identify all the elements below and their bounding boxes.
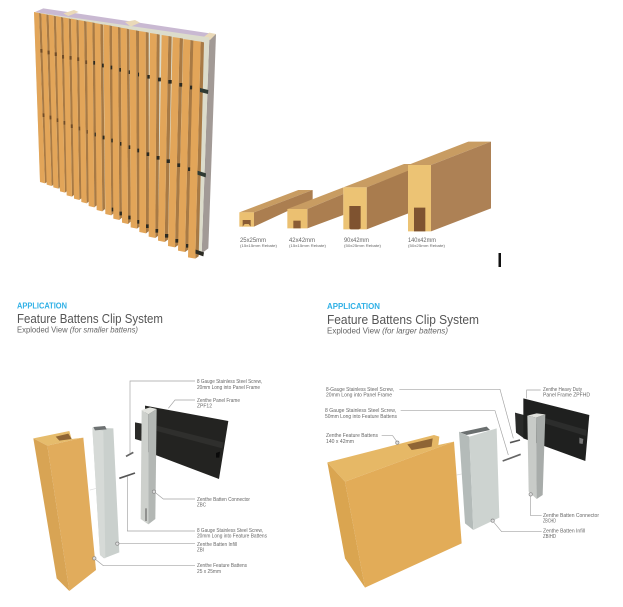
caption: 90x42mm	[344, 238, 382, 248]
labels: smaller battens: ZBI	[197, 548, 204, 554]
batten infill	[459, 427, 499, 530]
profile 140x42mm	[408, 142, 491, 231]
profile 90x42mm	[343, 164, 427, 229]
labels: larger battens: ZBCHD	[543, 518, 556, 524]
heading: right application: APPLICATION	[327, 302, 380, 311]
labels: smaller battens: 20mm Long into Panel Frame	[197, 385, 260, 391]
heavy duty panel frame	[515, 398, 589, 461]
labels: smaller battens: Zenthe Batten Connector	[197, 497, 250, 503]
wood batten row	[34, 12, 208, 259]
labels: larger battens: Panel Frame ZPFHD	[543, 392, 590, 398]
callout rings	[396, 441, 532, 522]
caption: 140x42mm: (50x25mm Rebate)	[408, 244, 446, 248]
labels: smaller battens: 20mm Long into Feature Battens	[197, 534, 267, 540]
labels: larger battens: Zenthe Heavy Duty	[543, 387, 582, 393]
labels: smaller battens: 25 x 25mm	[197, 569, 221, 575]
black text cursor mark	[498, 253, 501, 267]
labels: larger battens: 8 Gauge Stainless Steel Screw,	[325, 408, 396, 414]
feature batten	[327, 435, 462, 588]
heading: left application	[17, 302, 163, 334]
heading: left application: Feature Battens Clip System	[17, 312, 163, 326]
labels: larger battens: 140 x 42mm	[326, 439, 354, 445]
labels: larger battens: 50mm Long into Feature Battens	[325, 414, 397, 420]
screw lower	[119, 473, 135, 478]
profile 42x42mm	[287, 187, 343, 228]
heading: left application: Exploded View (for smaller battens)	[17, 326, 138, 334]
labels: larger battens: Zenthe Feature Battens	[326, 433, 378, 439]
illustration: four batten profiles	[239, 142, 491, 231]
caption: 25x25mm: 25x25mm	[240, 238, 266, 244]
labels: smaller battens	[197, 379, 267, 575]
caption: 90x42mm: 90x42mm	[344, 238, 369, 244]
batten connector	[527, 413, 545, 499]
labels: smaller battens: Zenthe Panel Frame	[197, 398, 240, 404]
labels: larger battens: 8-Gauge Stainless Steel Screw,	[326, 387, 394, 393]
batten connector	[141, 407, 157, 524]
labels: smaller battens: Zenthe Feature Battens	[197, 563, 247, 569]
feature batten	[33, 431, 96, 591]
screw upper	[510, 440, 520, 443]
caption: 140x42mm: 140x42mm	[408, 238, 436, 244]
labels: larger battens: 20mm Long into Panel Frame	[326, 392, 392, 398]
leader lines	[90, 381, 195, 566]
leader lines	[382, 389, 542, 532]
labels: larger battens: Zenthe Batten Connector	[543, 513, 599, 519]
caption: 42x42mm: (15x15mm Rebate)	[289, 244, 327, 248]
caption: 90x42mm: (50x25mm Rebate)	[344, 244, 382, 248]
labels: smaller battens: ZPF12	[197, 404, 212, 410]
labels: smaller battens: 8 Gauge Stainless Steel Screw,	[197, 528, 263, 534]
caption: 42x42mm	[289, 238, 327, 248]
callout rings	[93, 490, 156, 560]
caption: 140x42mm	[408, 238, 446, 248]
diagram: exploded view, smaller battens	[33, 381, 228, 591]
illustration: batten wall panel	[34, 8, 216, 259]
heading: right application	[327, 302, 479, 336]
profile 25x25mm	[239, 190, 313, 227]
heading: right application: Feature Battens Clip System	[327, 312, 479, 327]
caption: 25x25mm: (15x15mm Rebate)	[240, 244, 278, 248]
labels: larger battens: Zenthe Batten Infill	[543, 528, 585, 534]
heading: right application: Exploded View (for larger battens)	[327, 326, 448, 336]
panel frame	[135, 406, 228, 479]
labels: smaller battens: Zenthe Batten Infill	[197, 542, 237, 548]
labels: larger battens	[325, 387, 599, 540]
caption: 25x25mm	[240, 238, 278, 248]
screw lower	[503, 454, 521, 461]
screw upper	[126, 452, 133, 456]
labels: smaller battens: ZBC	[197, 502, 206, 508]
labels: smaller battens: 8 Gauge Stainless Steel Screw,	[197, 379, 262, 385]
diagram: exploded view, larger battens	[327, 389, 589, 588]
heading: left application: APPLICATION	[17, 302, 67, 310]
labels: larger battens: ZBIHD	[543, 534, 556, 540]
caption: 42x42mm: 42x42mm	[289, 238, 315, 244]
batten infill	[92, 426, 119, 558]
